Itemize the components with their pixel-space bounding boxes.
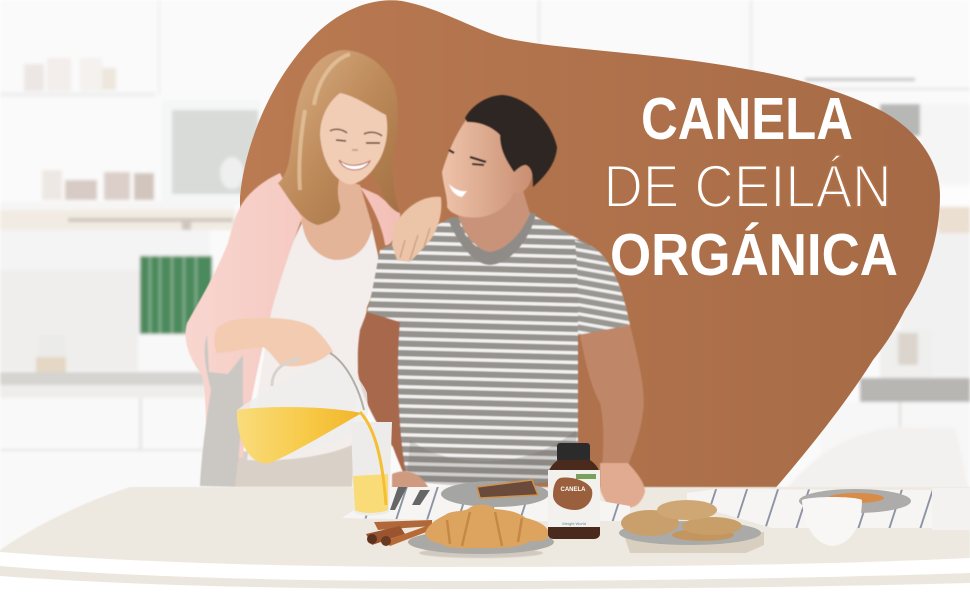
title line 2: DE CEILÁN bbox=[604, 153, 892, 220]
shirt shadow bbox=[407, 430, 578, 486]
right tiles and counter bbox=[820, 233, 970, 492]
croissant plate bbox=[408, 504, 554, 558]
cinnamon sticks bbox=[366, 520, 434, 546]
man's hands on table bbox=[392, 463, 645, 509]
man's sleeve bbox=[575, 240, 630, 335]
cutlery bbox=[390, 487, 430, 510]
left shelves bbox=[0, 0, 235, 230]
table edge bands bbox=[0, 552, 970, 600]
white cup bbox=[802, 497, 862, 546]
man's arms bbox=[358, 312, 644, 472]
right plate bbox=[799, 489, 911, 513]
woman's forearm and hand bbox=[214, 318, 333, 366]
man's shirt body bbox=[367, 215, 630, 486]
brown blob bbox=[240, 0, 940, 492]
bottle: Weight World bbox=[562, 521, 586, 526]
upper cabinets bbox=[538, 0, 970, 233]
cookies plate bbox=[619, 500, 761, 545]
man's head bbox=[442, 95, 557, 218]
plant bbox=[138, 256, 212, 375]
bottle bbox=[548, 443, 600, 539]
pitcher of juice bbox=[237, 353, 368, 463]
toast plate bbox=[441, 480, 549, 507]
woman bbox=[185, 50, 400, 487]
woman's hand on shoulder bbox=[392, 197, 441, 262]
towel right bbox=[687, 489, 935, 528]
woman's face bbox=[320, 93, 387, 184]
title bbox=[604, 86, 898, 288]
glass of juice bbox=[351, 412, 392, 516]
man bbox=[358, 95, 644, 486]
tank top bbox=[247, 223, 382, 460]
microwave bbox=[162, 100, 260, 204]
woman's lower body bbox=[234, 440, 356, 487]
napkin under cookies bbox=[623, 532, 764, 553]
woman's hair highlights bbox=[299, 54, 350, 190]
cardigan bbox=[185, 173, 400, 458]
chair bbox=[785, 427, 970, 490]
bottle: CANELA bbox=[560, 487, 586, 493]
left counter bbox=[0, 372, 205, 553]
rail and basket bbox=[68, 218, 233, 268]
chest bbox=[300, 172, 372, 262]
tiles bbox=[0, 230, 210, 372]
shirt collar bbox=[448, 212, 536, 265]
table bbox=[0, 487, 970, 600]
woman's hair bbox=[278, 50, 400, 225]
jar bbox=[36, 335, 66, 372]
title line 1: CANELA bbox=[641, 86, 853, 152]
man's neck bbox=[458, 180, 530, 252]
grey cardigan lining bbox=[200, 335, 243, 487]
title line 3: ORGÁNICA bbox=[610, 222, 898, 288]
towel left bbox=[342, 487, 630, 521]
